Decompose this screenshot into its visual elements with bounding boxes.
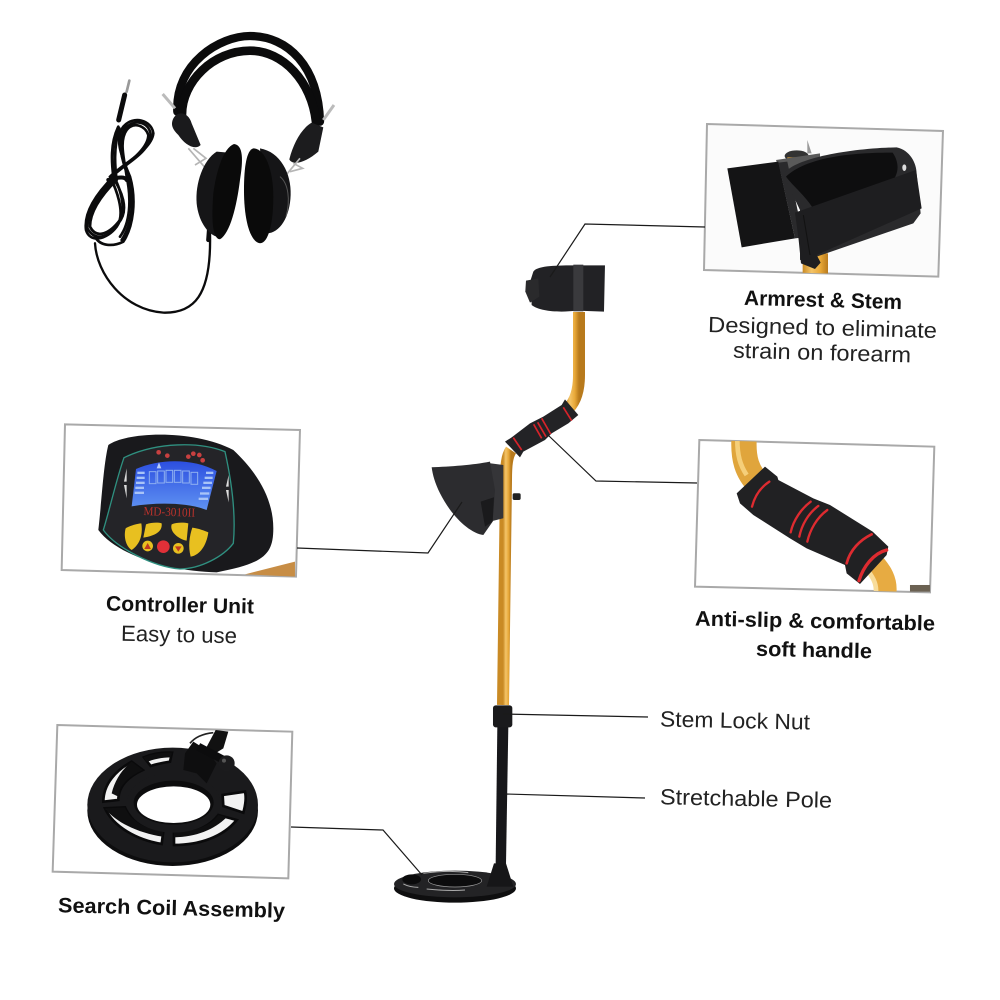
text: controller description: Easy to use bbox=[121, 621, 237, 648]
icon: headphones with cable bbox=[86, 36, 334, 313]
infographic canvas bbox=[52, 32, 944, 922]
right ear cup bbox=[260, 148, 291, 233]
heading: search coil assembly: Search Coil Assembly bbox=[58, 894, 286, 923]
panel: search coil photo bbox=[53, 725, 292, 878]
label: stretchable pole: Stretchable Pole bbox=[660, 784, 832, 813]
heading: controller unit: Controller Unit bbox=[106, 592, 254, 619]
heading: armrest and stem: Armrest & Stem bbox=[744, 287, 902, 314]
panel: controller unit photo bbox=[62, 424, 300, 577]
panel: armrest photo bbox=[704, 124, 943, 277]
metal detector: controller housing bbox=[432, 462, 521, 535]
metal detector: gold stems bbox=[503, 312, 579, 705]
leader lines bbox=[291, 224, 705, 875]
metal detector: armrest bbox=[525, 265, 605, 312]
label: stem lock nut: Stem Lock Nut bbox=[660, 706, 810, 735]
text: armrest description bbox=[708, 312, 937, 367]
panel: soft handle photo bbox=[695, 440, 934, 593]
heading: soft handle: Anti-slip & comfortable bbox=[695, 607, 935, 636]
metal detector: lock nut, pole and coil bbox=[394, 705, 516, 903]
text: armrest description: strain on forearm bbox=[733, 338, 911, 367]
panel: controller unit photo: MD-3010II bbox=[143, 504, 195, 520]
metal detector: foam handle bbox=[505, 399, 578, 457]
text: armrest description: Designed to eliminate bbox=[708, 312, 937, 343]
left ear cup bbox=[196, 152, 237, 237]
heading: soft handle bbox=[695, 607, 935, 663]
heading: soft handle: soft handle bbox=[756, 638, 872, 663]
